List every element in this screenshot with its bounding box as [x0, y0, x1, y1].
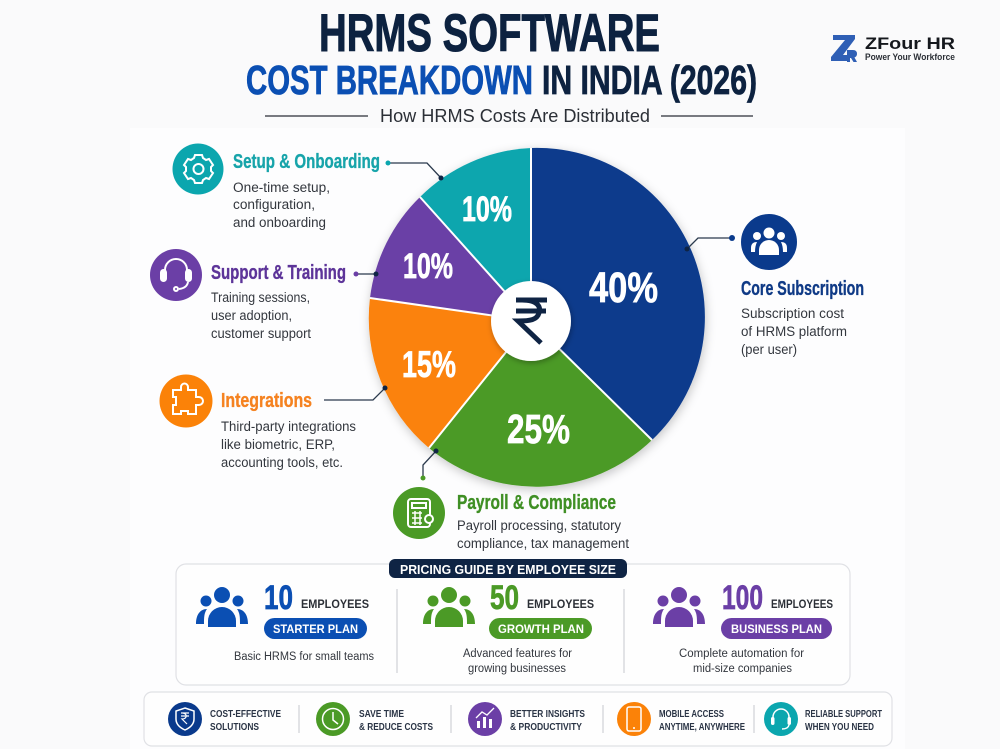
benefit: reliable support: RELIABLE SUPPORT [805, 709, 882, 720]
slice: support and training 10% [370, 197, 531, 321]
callout: integrations: Third-party integrations [221, 419, 356, 434]
callout: support and training: customer support [211, 326, 311, 341]
callout: core subscription: Subscription cost [741, 306, 844, 321]
callout: setup and onboarding: Setup & Onboarding [233, 151, 380, 173]
benefit: better insights: BETTER INSIGHTS [510, 709, 585, 720]
panel: benefits strip [144, 692, 892, 746]
growth plan column [423, 579, 594, 675]
benefit: cost-effective solutions: COST-EFFECTIVE [210, 709, 281, 720]
growth plan column: 50 [490, 579, 519, 617]
callout: setup and onboarding: and onboarding [233, 215, 326, 230]
slice: setup and onboarding 10% [420, 148, 531, 321]
benefit: reliable support [764, 702, 882, 736]
benefit: mobile access: MOBILE ACCESS [659, 709, 724, 720]
growth plan column: Advanced features for [463, 648, 572, 660]
title [246, 4, 757, 103]
growth plan column: growing businesses [468, 663, 566, 675]
percentage labels: 10% [462, 190, 512, 229]
starter plan column: 10 [264, 579, 293, 617]
title: HRMS SOFTWARE [319, 4, 660, 63]
growth plan column: GROWTH PLAN [498, 622, 584, 636]
benefit: reliable support: WHEN YOU NEED [805, 722, 874, 733]
callout: core subscription: (per user) [741, 342, 797, 357]
callout: core subscription: Core Subscription [741, 278, 864, 300]
business plan column: mid-size companies [693, 663, 792, 675]
percentage labels: 10% [403, 247, 453, 286]
callout: integrations: like biometric, ERP, [221, 437, 335, 452]
pricing heading pill: PRICING GUIDE BY EMPLOYEE SIZE [400, 562, 616, 577]
callout: setup and onboarding: configuration, [233, 197, 315, 212]
business plan column: BUSINESS PLAN [731, 622, 822, 636]
percentage labels [402, 190, 658, 452]
percentage labels: 40% [589, 264, 658, 312]
callout: support and training: user adoption, [211, 308, 292, 323]
callout: support and training: Support & Training [211, 262, 346, 284]
pie chart [369, 148, 705, 487]
benefit: cost-effective solutions: SOLUTIONS [210, 722, 259, 733]
benefit: save time: & REDUCE COSTS [359, 722, 433, 733]
benefit: mobile access: ANYTIME, ANYWHERE [659, 722, 745, 733]
benefit: cost-effective solutions [168, 702, 281, 736]
business plan column [653, 579, 833, 675]
starter plan column [196, 579, 374, 663]
benefit: save time [316, 702, 433, 736]
benefit: save time: SAVE TIME [359, 709, 404, 720]
title: IN INDIA (2026) [542, 57, 757, 103]
business plan column: 100 [722, 579, 763, 617]
panel: pricing guide [176, 559, 850, 685]
logo: ZFour HR [831, 34, 955, 62]
callout: payroll and compliance: Payroll processing, statutory [457, 518, 621, 533]
callout: integrations: Integrations [221, 390, 312, 412]
logo: ZFour HR: ZFour HR [865, 34, 955, 53]
callout: core subscription [684, 214, 864, 357]
percentage labels: 25% [507, 406, 570, 452]
business plan column: Complete automation for [679, 648, 804, 660]
slice: core subscription 40% [531, 148, 705, 440]
benefit: mobile access [617, 702, 745, 736]
subtitle with rules: How HRMS Costs Are Distributed [380, 106, 650, 126]
starter plan column: STARTER PLAN [273, 622, 358, 636]
percentage labels: 15% [402, 344, 456, 385]
callout: integrations: accounting tools, etc. [221, 455, 343, 470]
starter plan column: EMPLOYEES [301, 597, 369, 611]
callout: payroll and compliance: Payroll & Compliance [457, 492, 616, 514]
center rupee hub [491, 281, 571, 361]
benefit: better insights: & PRODUCTIVITY [510, 722, 582, 733]
callout: support and training: Training sessions, [211, 290, 310, 305]
growth plan column: EMPLOYEES [527, 597, 594, 611]
business plan column: EMPLOYEES [771, 597, 833, 611]
slice: integrations 15% [369, 298, 531, 448]
callout: setup and onboarding [172, 144, 444, 230]
callout: setup and onboarding: One-time setup, [233, 180, 330, 195]
callout: integrations [160, 374, 388, 470]
slice: payroll and compliance 25% [429, 321, 652, 487]
callout: payroll and compliance: compliance, tax management [457, 536, 629, 551]
callout: support and training [150, 249, 378, 341]
starter plan column: Basic HRMS for small teams [234, 651, 374, 663]
callout: payroll and compliance [393, 448, 629, 551]
benefit: better insights [468, 702, 585, 736]
logo: ZFour HR: Power Your Workforce [865, 52, 955, 62]
title: COST BREAKDOWN [246, 57, 533, 103]
callout: core subscription: of HRMS platform [741, 324, 847, 339]
